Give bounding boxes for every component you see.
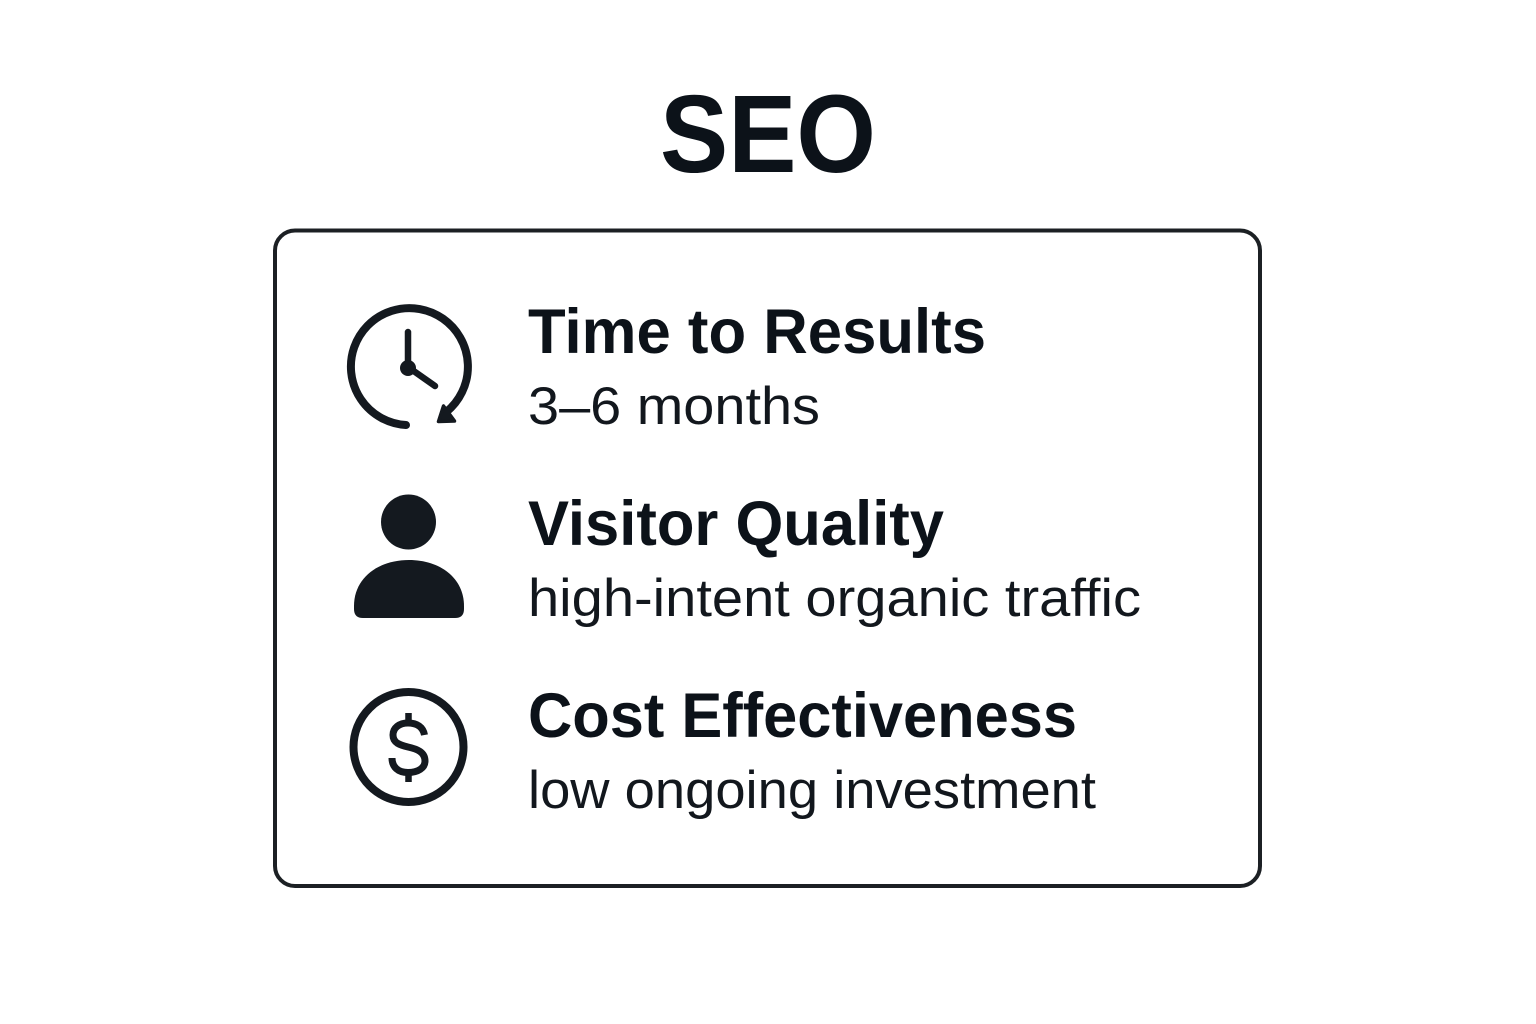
heading: time to results: Time to Results [528, 297, 986, 367]
text: high-intent organic traffic: high-intent organic traffic [528, 569, 1141, 628]
row: time to results [351, 297, 986, 436]
row: cost effectiveness [354, 681, 1096, 820]
panel: SEO attributes [275, 230, 1260, 886]
heading: cost effectiveness: Cost Effectiveness [528, 681, 1077, 751]
text: 3–6 months: 3–6 months [528, 377, 820, 436]
title: SEO [660, 73, 876, 196]
heading: visitor quality: Visitor Quality [528, 489, 944, 559]
icon: clock with circular arrow [351, 308, 468, 425]
row: visitor quality [354, 489, 1141, 628]
text: low ongoing investment: low ongoing investment [528, 761, 1096, 820]
icon: person [354, 494, 464, 618]
icon: dollar coin [354, 692, 464, 802]
